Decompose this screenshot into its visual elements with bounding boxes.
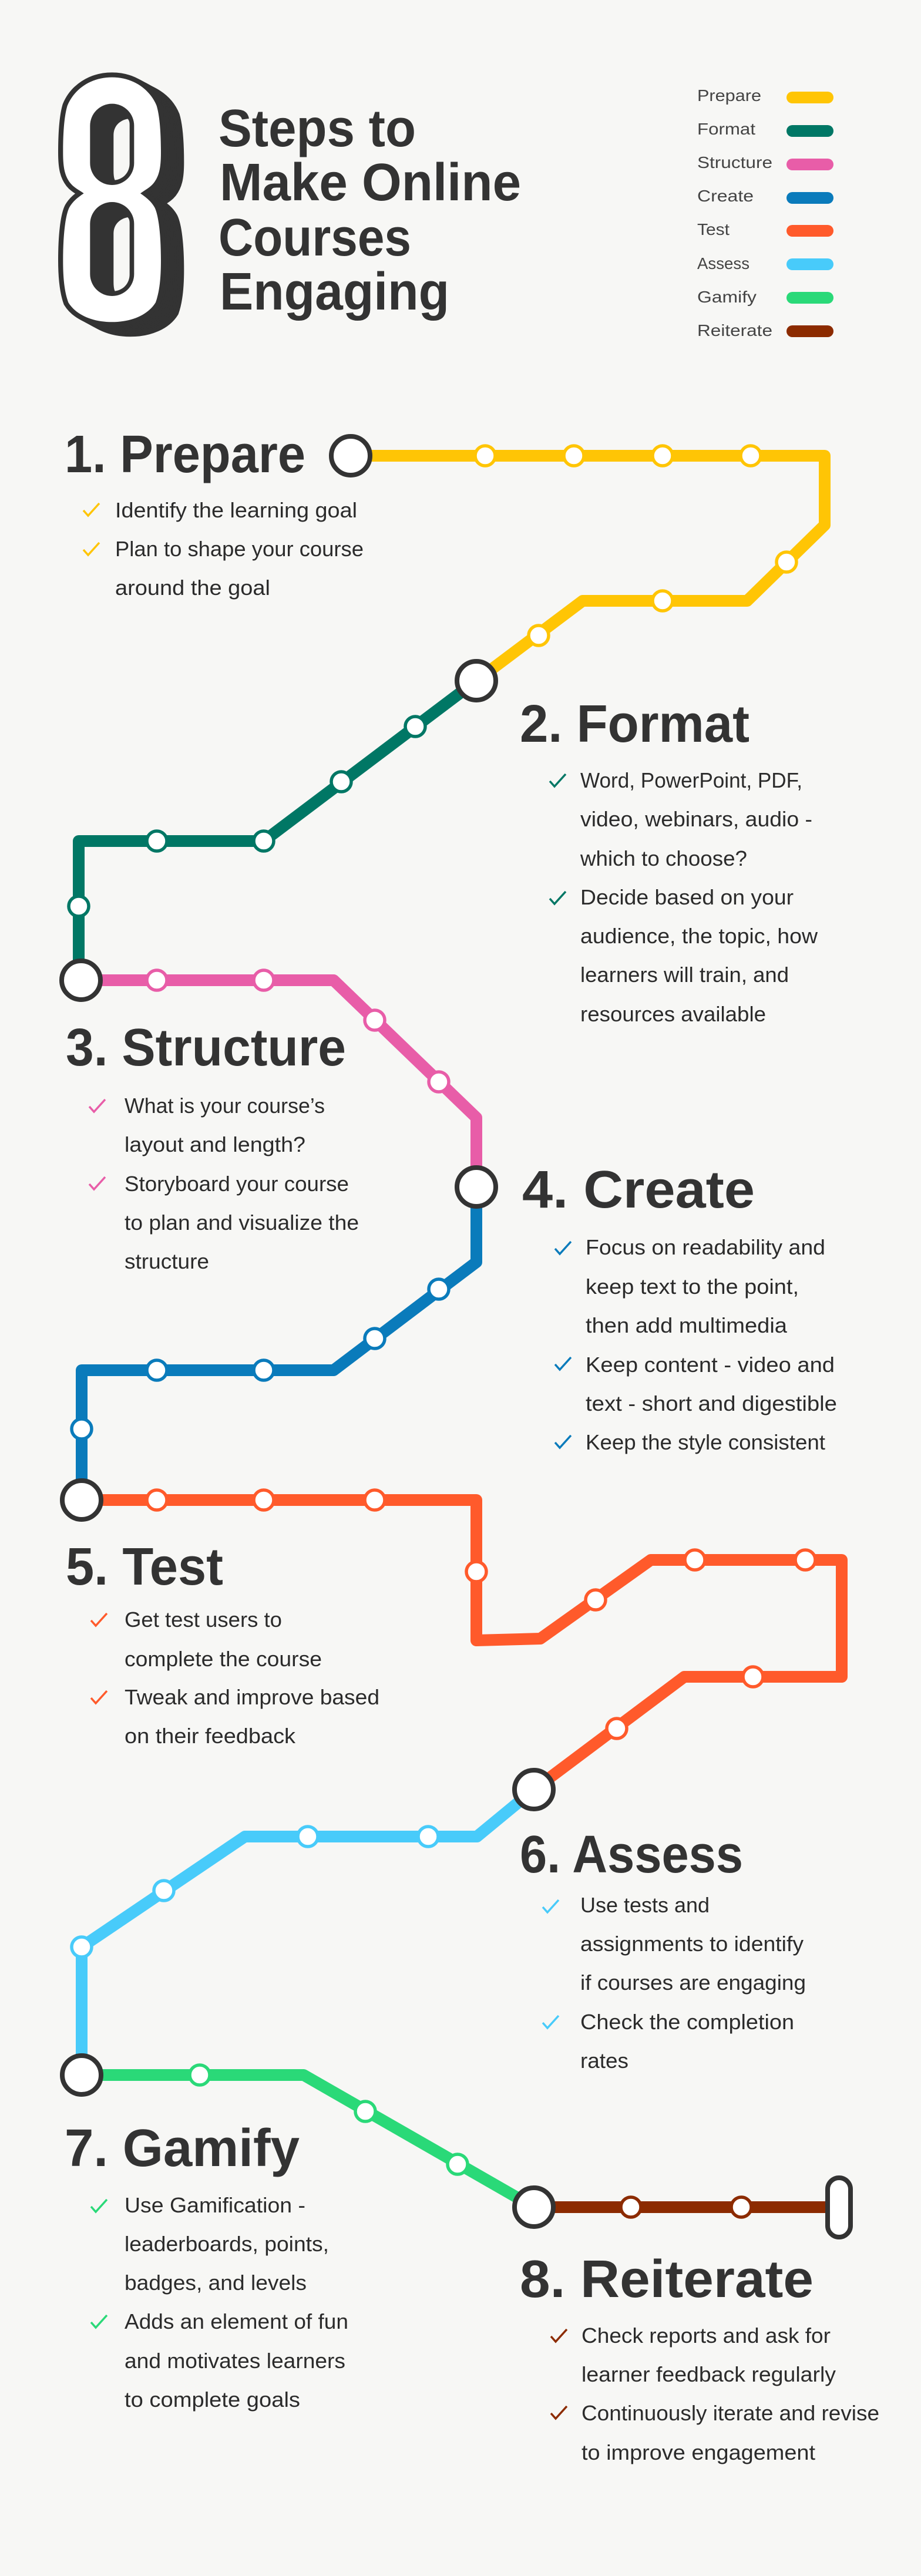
panel: step 4 create: Focus on readability and	[586, 1235, 825, 1259]
panel: step 2 format: resources available	[580, 1002, 766, 1026]
panel: step 7 gamify: and motivates learners	[125, 2349, 345, 2373]
panel: step 7 gamify: leaderboards, points,	[125, 2232, 329, 2256]
panel: step 8 reiterate: learner feedback regularly	[581, 2362, 836, 2386]
panel: step 2 format: learners will train, and	[580, 963, 789, 987]
transit line: structure	[81, 970, 476, 1187]
transit line: prepare	[351, 446, 825, 681]
legend: Prepare	[697, 86, 761, 105]
main stations	[62, 436, 553, 2227]
panel: step 2 format: which to choose?	[580, 846, 747, 870]
panel: step 8 reiterate: Continuously iterate and revise	[581, 2401, 879, 2425]
transit line: create	[72, 1187, 476, 1500]
panel: step 1 prepare	[65, 425, 364, 600]
panel: step 1 prepare: Plan to shape your course	[115, 537, 364, 561]
legend: Format	[697, 120, 755, 138]
transit line: test	[82, 1490, 842, 1790]
legend: Assess	[697, 254, 749, 273]
panel: step 1 prepare: Identify the learning goal	[115, 498, 357, 522]
panel: step 5 test: on their feedback	[125, 1724, 296, 1748]
transit line: assess	[72, 1790, 534, 2075]
panel: step 4 create: Keep content - video and	[586, 1353, 835, 1377]
panel: step 8 reiterate: Check reports and ask for	[581, 2323, 831, 2348]
panel: step 4 create: 4. Create	[522, 1161, 755, 1219]
panel: step 3 structure: 3. Structure	[66, 1018, 346, 1077]
legend	[697, 86, 833, 339]
panel: step 7 gamify: badges, and levels	[125, 2271, 307, 2295]
panel: step 5 test: Get test users to	[125, 1608, 282, 1632]
icon: big number 8	[63, 78, 179, 332]
title	[219, 99, 521, 321]
transit line: format	[69, 681, 476, 980]
panel: step 4 create	[522, 1161, 837, 1454]
terminal station	[828, 2178, 851, 2237]
panel: step 8 reiterate: 8. Reiterate	[520, 2250, 814, 2309]
panel: step 3 structure: to plan and visualize the	[125, 1210, 359, 1235]
panel: step 1 prepare: around the goal	[115, 576, 270, 600]
transit line: gamify	[82, 2065, 534, 2207]
title: Make Online	[220, 153, 521, 212]
panel: step 3 structure	[66, 1018, 359, 1273]
legend: Reiterate	[697, 321, 772, 339]
panel: step 4 create: Keep the style consistent	[586, 1430, 825, 1454]
panel: step 2 format	[520, 695, 818, 1026]
panel: step 2 format: Decide based on your	[580, 885, 794, 909]
panel: step 5 test	[66, 1538, 379, 1748]
panel: step 6 assess: rates	[580, 2049, 628, 2073]
panel: step 3 structure: Storyboard your course	[125, 1172, 349, 1196]
panel: step 3 structure: What is your course’s	[125, 1094, 325, 1118]
panel: step 5 test: Tweak and improve based	[125, 1685, 379, 1709]
panel: step 7 gamify: to complete goals	[125, 2387, 300, 2412]
panel: step 2 format: Word, PowerPoint, PDF,	[580, 768, 802, 792]
panel: step 1 prepare: 1. Prepare	[65, 425, 305, 484]
panel: step 5 test: complete the course	[125, 1647, 322, 1671]
panel: step 3 structure: structure	[125, 1249, 209, 1273]
panel: step 2 format: video, webinars, audio -	[580, 807, 812, 831]
panel: step 7 gamify	[65, 2119, 348, 2412]
legend: Structure	[697, 153, 772, 171]
title: Engaging	[220, 263, 449, 321]
panel: step 6 assess: 6. Assess	[520, 1825, 743, 1884]
panel: step 6 assess: Check the completion	[580, 2010, 794, 2034]
title: Courses	[219, 208, 411, 267]
panel: step 5 test: 5. Test	[66, 1538, 223, 1596]
panel: step 2 format: 2. Format	[520, 695, 749, 754]
title: Steps to	[219, 99, 416, 158]
panel: step 2 format: audience, the topic, how	[580, 924, 818, 948]
panel: step 4 create: keep text to the point,	[586, 1274, 799, 1299]
panel: step 6 assess	[520, 1825, 806, 2073]
panel: step 6 assess: if courses are engaging	[580, 1970, 806, 1995]
panel: step 6 assess: assignments to identify	[580, 1932, 804, 1956]
panel: step 8 reiterate	[520, 2250, 879, 2464]
panel: step 4 create: text - short and digestible	[586, 1391, 837, 1415]
legend: Test	[697, 220, 730, 238]
panel: step 3 structure: layout and length?	[125, 1132, 305, 1156]
panel: step 8 reiterate: to improve engagement	[581, 2440, 815, 2464]
transit line: reiterate	[534, 2197, 839, 2217]
legend: Create	[697, 187, 754, 205]
panel: step 6 assess: Use tests and	[580, 1893, 710, 1917]
panel: step 7 gamify: 7. Gamify	[65, 2119, 300, 2178]
panel: step 4 create: then add multimedia	[586, 1313, 788, 1337]
panel: step 7 gamify: Adds an element of fun	[125, 2309, 348, 2333]
legend: Gamify	[697, 288, 757, 306]
panel: step 7 gamify: Use Gamification -	[125, 2193, 305, 2217]
